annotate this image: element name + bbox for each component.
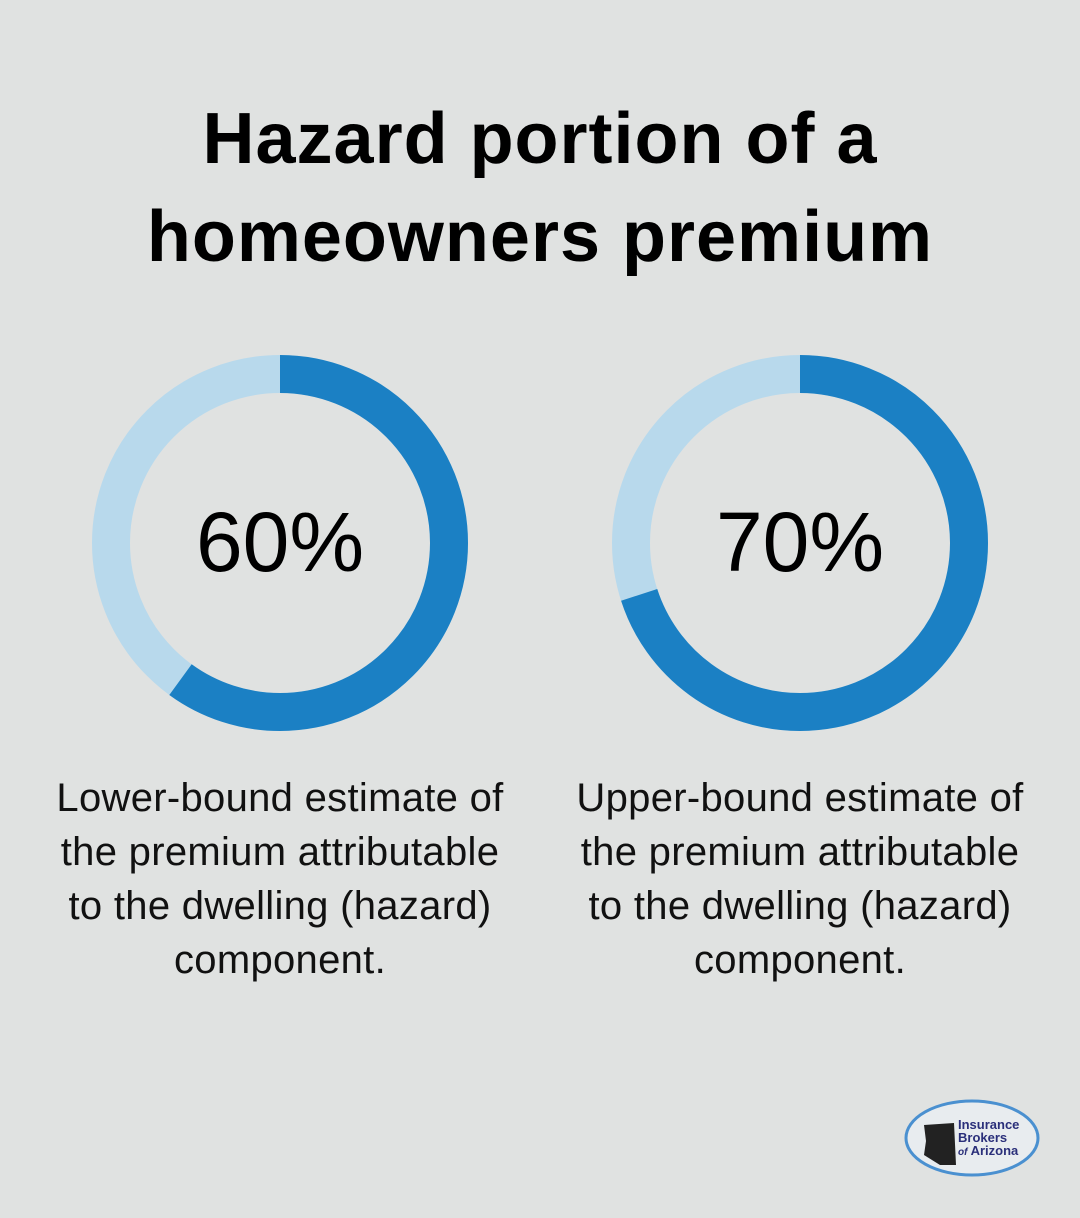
caption right: to the dwelling (hazard): [588, 884, 1011, 928]
chart: donut 70%: 70%: [716, 495, 884, 589]
title: Hazard portion of a: [202, 99, 878, 179]
logo: of Arizona: [958, 1143, 1019, 1158]
logo: Insurance: [958, 1117, 1019, 1132]
title: [147, 99, 933, 277]
caption right: Upper-bound estimate of: [576, 776, 1024, 820]
caption left: to the dwelling (hazard): [68, 884, 491, 928]
logo: Brokers: [958, 1130, 1007, 1145]
chart: donut 70%: [612, 355, 988, 731]
caption right: component.: [694, 938, 906, 982]
caption right: [576, 776, 1024, 982]
chart: donut 60%: 60%: [196, 495, 364, 589]
logo: [904, 1100, 1040, 1176]
title: homeowners premium: [147, 197, 933, 277]
caption left: the premium attributable: [61, 830, 499, 874]
caption left: Lower-bound estimate of: [56, 776, 504, 820]
caption left: [56, 776, 504, 982]
caption left: component.: [174, 938, 386, 982]
chart: donut 60%: [92, 355, 468, 731]
caption right: the premium attributable: [581, 830, 1019, 874]
